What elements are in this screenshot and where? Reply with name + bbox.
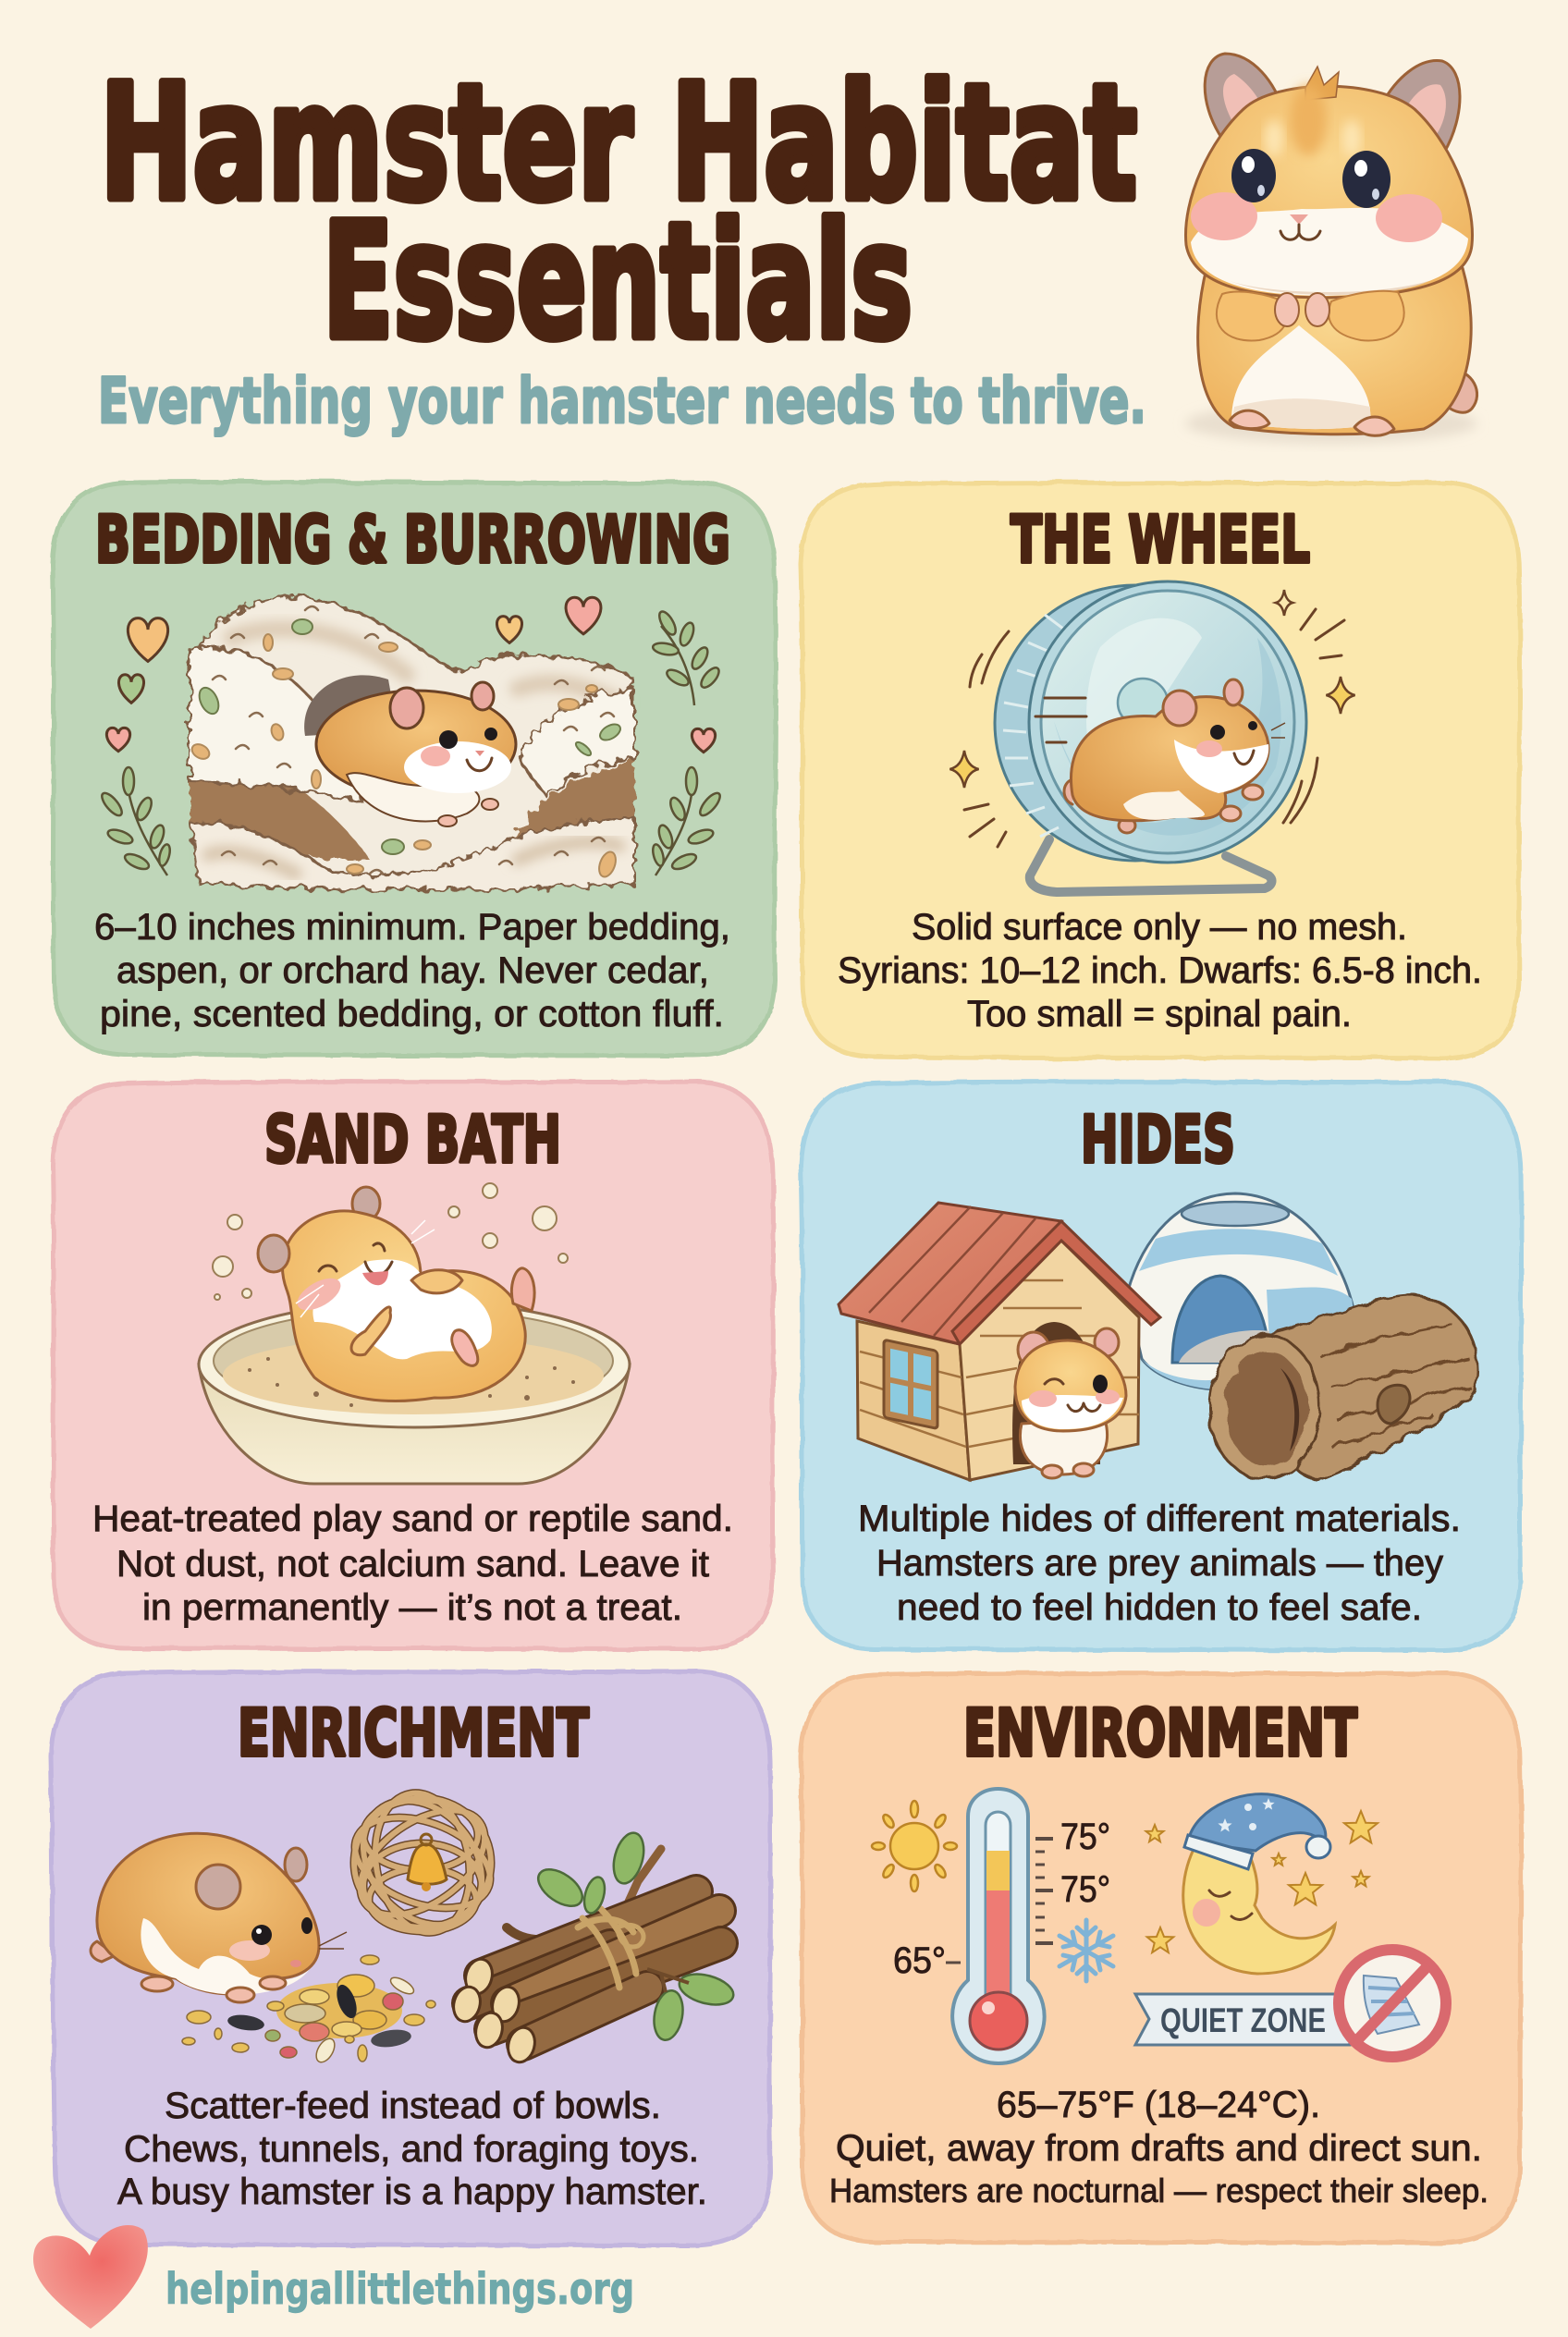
body text — [858, 1499, 1461, 1628]
icon: no drafts sign — [1339, 1950, 1446, 2057]
body text: Hamsters are nocturnal — respect their sleep. — [829, 2172, 1488, 2209]
banner: quiet zone: QUIET ZONE — [1160, 2001, 1326, 2039]
body text: Multiple hides of different materials. — [858, 1499, 1461, 1539]
body text — [94, 907, 730, 1034]
mascot hamster — [1185, 54, 1477, 444]
illustration: wheel stand — [1030, 839, 1271, 892]
illustration: woven ball with bell — [339, 1777, 506, 1949]
illustration: scattered food — [182, 1955, 435, 2065]
panel: the wheel — [801, 483, 1520, 1058]
panel background — [801, 483, 1520, 1058]
body text: Too small = spinal pain. — [967, 994, 1352, 1034]
body text: Quiet, away from drafts and direct sun. — [836, 2128, 1482, 2169]
icons: stars — [1146, 1811, 1378, 1952]
panel: bedding and burrowing — [53, 482, 776, 1056]
body text: Syrians: 10–12 inch. Dwarfs: 6.5-8 inch. — [838, 950, 1482, 991]
illustration: bundle of chew sticks — [450, 1829, 737, 2065]
illustration: running hamster — [1064, 679, 1285, 833]
body text — [117, 2086, 707, 2212]
body text — [829, 2085, 1488, 2209]
panel background — [801, 1673, 1521, 2243]
illustration: striped igloo hide — [1127, 1193, 1354, 1389]
banner: quiet zone — [1135, 1994, 1350, 2045]
panel background — [53, 482, 776, 1056]
icon: snowflake — [1060, 1920, 1113, 1981]
panel: hides — [801, 1082, 1522, 1650]
panel background — [801, 1082, 1522, 1650]
heading: ENRICHMENT — [238, 1695, 589, 1771]
icon: sprig top right — [652, 609, 722, 705]
panel background — [53, 1082, 774, 1649]
panel: environment — [801, 1673, 1521, 2243]
illustration: foraging hamster — [91, 1833, 347, 2002]
icons: sand bubbles — [213, 1183, 568, 1300]
title: Hamster Habitat — [100, 50, 1137, 236]
chart axis: thermometer ticks and labels: 75° — [1060, 1817, 1110, 1857]
title: Essentials — [323, 189, 913, 374]
illustration: bathing hamster — [258, 1187, 534, 1401]
icon: sprig bottom left — [99, 767, 172, 875]
footer website: helpingallittlethings.org — [165, 2264, 634, 2314]
footer heart icon — [33, 2225, 148, 2329]
icon: sprig bottom right — [651, 767, 723, 875]
body text: need to feel hidden to feel safe. — [897, 1587, 1422, 1628]
illustration: hamster in doorway — [1015, 1328, 1126, 1478]
body text: aspen, or orchard hay. Never cedar, — [116, 950, 709, 991]
body text: in permanently — it’s not a treat. — [142, 1587, 682, 1628]
body text: pine, scented bedding, or cotton fluff. — [100, 994, 724, 1034]
illustration: wheel — [995, 581, 1306, 863]
illustration: bedding mound with hamster — [190, 595, 634, 889]
icons: sparkles and motion lines — [949, 590, 1355, 847]
panel: enrichment — [51, 1671, 771, 2245]
body text: Scatter-feed instead of bowls. — [165, 2086, 661, 2126]
body text: Not dust, not calcium sand. Leave it — [116, 1544, 709, 1585]
icon: sleeping moon with nightcap — [1183, 1794, 1335, 1974]
chart axis: thermometer ticks and labels: 75° — [1060, 1869, 1110, 1910]
subtitle: Everything your hamster needs to thrive. — [98, 365, 1146, 438]
heading: BEDDING & BURROWING — [95, 502, 730, 578]
body text: Solid surface only — no mesh. — [912, 907, 1407, 948]
body text: Hamsters are prey animals — they — [876, 1543, 1443, 1584]
body text — [92, 1499, 733, 1628]
icon: sun — [872, 1801, 957, 1891]
illustration: sand bowl back — [199, 1302, 630, 1484]
illustration: hollow log hide — [1209, 1295, 1477, 1479]
body text: Chews, tunnels, and foraging toys. — [124, 2129, 699, 2170]
heading: HIDES — [1081, 1102, 1235, 1178]
body text: A busy hamster is a happy hamster. — [117, 2172, 707, 2212]
illustration: wooden house hide — [839, 1203, 1160, 1480]
panel: sand bath — [53, 1082, 774, 1649]
body text: Heat-treated play sand or reptile sand. — [92, 1499, 733, 1539]
heading: ENVIRONMENT — [963, 1695, 1357, 1771]
heading: SAND BATH — [264, 1102, 561, 1178]
body text: 65–75°F (18–24°C). — [997, 2085, 1320, 2125]
panel background — [51, 1671, 771, 2245]
icon: thermometer — [952, 1789, 1045, 2063]
body text: 6–10 inches minimum. Paper bedding, — [94, 907, 730, 948]
icons: hearts — [106, 597, 716, 752]
chart axis: thermometer ticks and labels: 65° — [893, 1940, 946, 1981]
body text — [838, 907, 1482, 1034]
title — [100, 50, 1137, 374]
chart axis: thermometer ticks and labels — [893, 1817, 1110, 1981]
heading: THE WHEEL — [1011, 502, 1310, 578]
